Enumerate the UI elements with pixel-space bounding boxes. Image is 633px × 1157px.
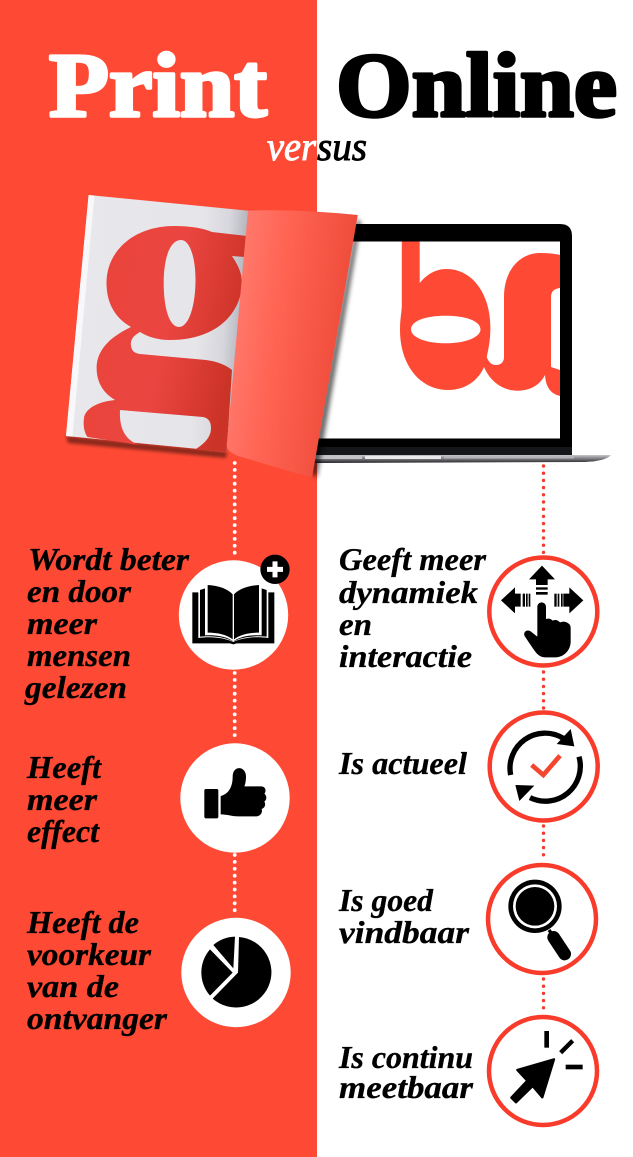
text: online claim 2: Is actueel [338,745,467,781]
text: print claim 3: Heeft de [26,904,139,940]
icon: touch gesture with arrows [489,558,597,666]
subheading: versus: sus [317,124,367,169]
text: print claim 1: meer [27,605,98,641]
subheading: versus: ver [267,124,316,169]
text: online claim 1: en [339,606,372,642]
icon: magnifying glass [488,865,596,973]
text: print claim 3: van de [27,968,119,1004]
connector: online column dots [542,466,545,1014]
subheading: versus [267,124,367,169]
connector: print column dots [233,463,237,917]
illustration: magazine [66,195,361,478]
magazine flap shadow [310,219,361,478]
text: print claim 1: en door [27,573,132,609]
text: online claim 3: Is goed [338,882,434,918]
text: online claim 1: interactie [339,638,472,674]
heading: Print: Print [49,35,267,136]
illustration: laptop [300,224,611,463]
icon: pie chart [181,918,291,1027]
text: online claim 3 [338,882,470,950]
text: print claim 1 [24,541,190,705]
icon: refresh with check [490,712,598,820]
text: online claim 1: Geeft meer [339,541,487,577]
text: online claim 4: Is continu [338,1039,473,1075]
text: print claim 3 [26,904,168,1036]
panel: print red background [0,0,317,1157]
magazine turned page [227,210,358,478]
text: online claim 1: dynamiek [339,574,478,610]
text: online claim 1 [339,541,487,674]
text: print claim 2 [26,749,102,849]
text: online claim 4: meetbaar [339,1069,474,1105]
magazine cover artwork [84,226,247,452]
text: print claim 1: mensen [27,637,131,673]
icon: thumbs up [180,743,290,853]
text: online claim 3: vindbaar [339,914,470,950]
text: print claim 3: voorkeur [27,936,152,972]
text: print claim 2: effect [27,813,100,849]
text: online claim 4 [338,1039,474,1105]
icon: open book with plus [179,555,290,670]
screen artwork [400,242,560,396]
text: print claim 2: Heeft [26,749,102,785]
text: print claim 3: ontvanger [27,1000,168,1036]
icon: cursor click [489,1017,597,1125]
text: print claim 2: meer [27,781,98,817]
text: print claim 1: Wordt beter [28,541,190,577]
heading: Online: Online [336,35,617,136]
text: print claim 1: gelezen [24,669,127,705]
